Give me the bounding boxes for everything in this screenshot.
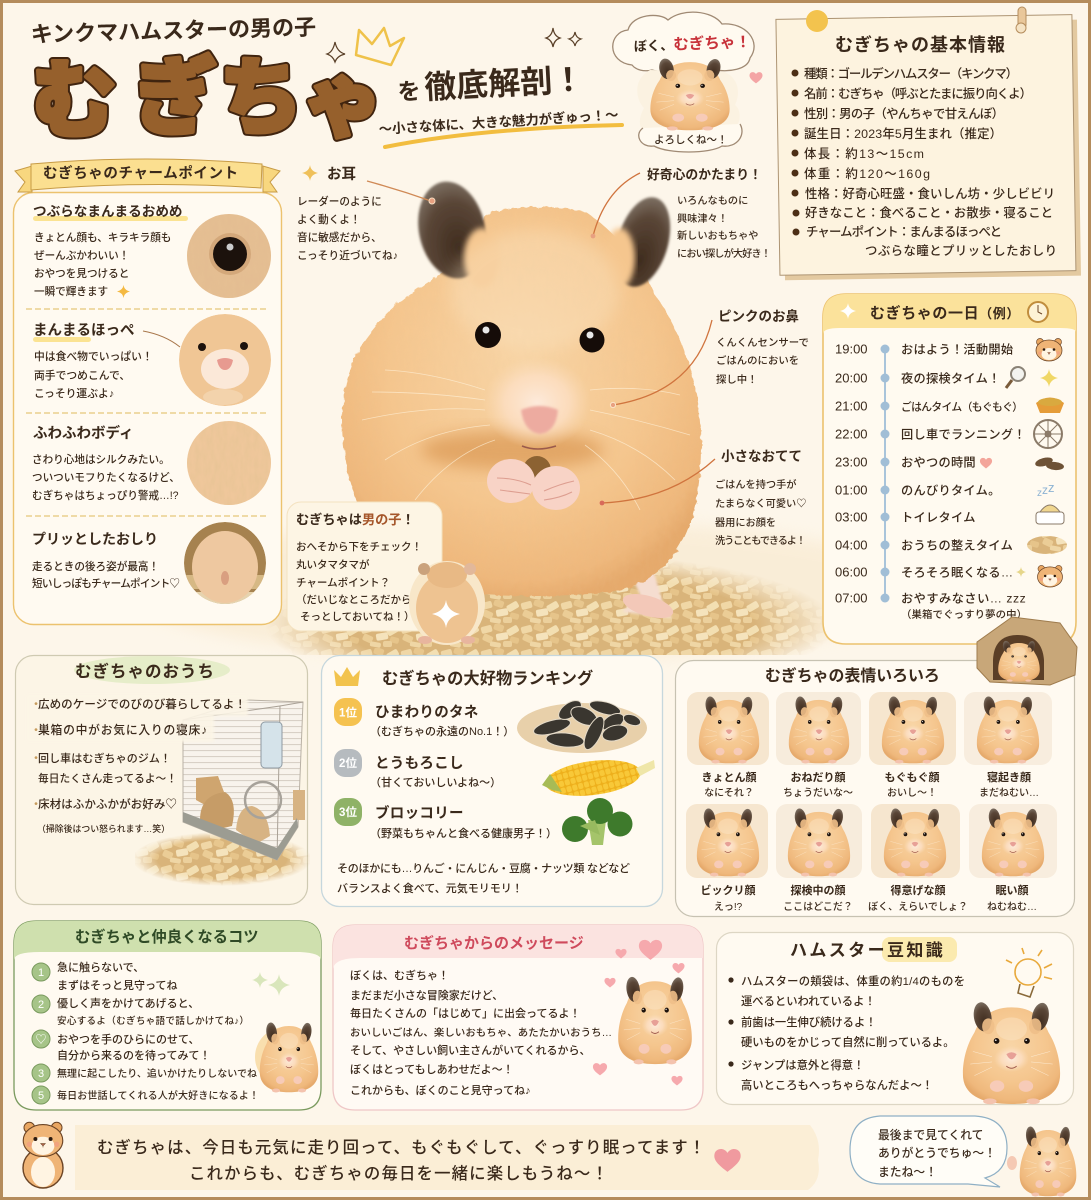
heading: むぎちゃのおうち xyxy=(75,661,215,681)
trivia list: 前歯は一生伸び続けるよ！ xyxy=(741,1015,877,1029)
cartoon hamster xyxy=(23,1122,63,1188)
trivia list: ジャンプは意外と得意！ xyxy=(741,1058,864,1072)
expression captions row 1: ちょうだいな〜 xyxy=(783,787,853,799)
tips numbers: 1 xyxy=(38,967,44,979)
label: curiosity: 新しいおもちゃや xyxy=(677,229,758,242)
main title: mugicha xyxy=(32,51,383,148)
home list: 巣箱の中がお気に入りの寝床♪ xyxy=(38,723,207,737)
heading: むぎちゃの大好物ランキング xyxy=(382,669,593,688)
label: ear: 音に敏感だから、 xyxy=(297,231,382,244)
timeline rows: 04:00 xyxy=(835,538,868,552)
timeline rows: 23:00 xyxy=(835,454,868,470)
tips text: 無理に起こしたり、追いかけたりしないでね xyxy=(57,1067,257,1080)
timeline rows: （巣箱でぐっすり夢の中） xyxy=(901,608,1027,621)
label: ear: レーダーのように xyxy=(297,195,382,208)
speech bubble: boku mugicha xyxy=(613,12,763,152)
item: cheeks: こっそり運ぶよ♪ xyxy=(34,387,114,400)
panel: charm points xyxy=(14,159,282,624)
home list xyxy=(30,697,246,834)
bubble text: ぼく、むぎちゃ！ xyxy=(633,32,751,55)
timeline rows: そろそろ眠くなる… xyxy=(901,566,1013,580)
tips text: 優しく声をかけてあげると、 xyxy=(57,996,199,1010)
timeline icons: z xyxy=(1037,488,1042,499)
expression captions row 1: きょとん顔 xyxy=(702,770,756,784)
icon: pin xyxy=(1016,7,1026,33)
hamster in cardboard house xyxy=(977,617,1077,685)
rank 3 xyxy=(334,798,632,845)
callout: boy: そっとしておいてね！） xyxy=(300,610,415,623)
label: curiosity: いろんなものに xyxy=(677,195,748,207)
photo: rear view xyxy=(184,522,266,606)
trivia list: 運べるといわれているよ！ xyxy=(741,995,876,1008)
icon: sparkles xyxy=(327,28,581,62)
timeline rows: 22:00 xyxy=(835,426,868,442)
fact list: 体重：約120〜160g xyxy=(804,166,930,181)
callout: boy: おへそから下をチェック！ xyxy=(296,541,422,553)
panel: mugicha's home xyxy=(16,656,310,904)
home list: 床材はふかふかがお好み♡ xyxy=(38,797,177,811)
photo: waving hamster xyxy=(1007,1126,1076,1196)
paws and food xyxy=(487,456,580,510)
rank 3: ブロッコリー xyxy=(375,804,464,822)
icon: broccoli xyxy=(562,798,632,845)
timeline rows xyxy=(835,342,1027,621)
timeline rows: 夜の探検タイム！ xyxy=(901,370,1001,386)
icon: crown xyxy=(356,28,404,65)
heading xyxy=(74,656,230,684)
heading: ハムスター豆知識 xyxy=(790,941,945,960)
trivia list xyxy=(728,974,965,1092)
timeline rows: トイレタイム xyxy=(901,510,976,524)
photo: small hamster xyxy=(650,58,730,130)
label: small paws: 小さなおてて xyxy=(721,449,802,464)
speech bubble: thanks: 最後まで見てくれて xyxy=(878,1128,983,1142)
other foods text: バランスよく食べて、元気モリモリ！ xyxy=(337,881,523,895)
footer message: むぎちゃは、今日も元気に走り回って、もぐもぐして、ぐっすり眠ってます！ xyxy=(97,1139,706,1157)
tips text: まずはそっと見守ってね xyxy=(57,979,177,992)
trivia list: ハムスターの頬袋は、体重の約1/4のものを xyxy=(741,974,965,988)
photo: hamster xyxy=(618,976,692,1064)
title block xyxy=(30,15,622,148)
item: fluffy body: さわり心地はシルクみたい。 xyxy=(32,453,170,466)
timeline rows: 01:00 xyxy=(835,482,868,498)
timeline rows: 19:00 xyxy=(835,342,868,356)
photo: hamster xyxy=(963,1001,1060,1104)
message text: おいしいごはん、楽しいおもちゃ、あたたかいおうち… xyxy=(350,1026,612,1039)
icon: hearts xyxy=(593,940,685,1086)
rank 1: （むぎちゃの永遠のNo.1！） xyxy=(370,724,514,738)
timeline rows: 07:00 xyxy=(835,590,868,606)
expression tiles row 2 xyxy=(686,804,1057,878)
timeline rows: 06:00 xyxy=(835,564,868,580)
expression tiles row 1 xyxy=(687,692,1052,765)
item: eyes: おやつを見つけると xyxy=(34,268,129,280)
expression captions row 1: なにそれ？ xyxy=(704,787,754,799)
item: eyes xyxy=(33,204,271,298)
item: cheeks: 中は食べ物でいっぱい！ xyxy=(34,349,153,363)
item: cheeks: 両手でつめこんで、 xyxy=(34,368,130,382)
fur texture xyxy=(342,205,702,600)
speech bubble: thanks xyxy=(850,1116,1007,1187)
subtitle: golden hamster boy: キンクマハムスターの男の子 xyxy=(30,15,316,47)
panel: message xyxy=(333,925,703,1110)
main title: mugicha: む xyxy=(32,54,116,148)
panel: basic info xyxy=(776,7,1081,280)
home list: ・ xyxy=(30,751,42,765)
item: eyes: つぶらなまんまるおめめ xyxy=(33,204,183,219)
label: pink nose: くんくんセンサーで xyxy=(716,337,809,349)
trivia list: 硬いものをかじって自然に削っているよ。 xyxy=(741,1035,955,1049)
heading xyxy=(840,302,1048,322)
main title: mugicha: む xyxy=(32,54,116,148)
item: fluffy body xyxy=(32,421,271,505)
label: ear: お耳 xyxy=(327,166,356,183)
photo: fur xyxy=(187,421,271,505)
fact list: 名前：むぎちゃ（呼ぶとたまに振り向くよ） xyxy=(804,86,1032,101)
expression captions row 2: 探検中の顔 xyxy=(790,883,846,897)
heading: むぎちゃの基本情報 xyxy=(835,34,1006,55)
label: curiosity: におい探しが大好き！ xyxy=(677,247,771,260)
main hamster photo xyxy=(342,175,702,623)
footer band xyxy=(75,1125,819,1190)
timeline rows: 回し車でランニング！ xyxy=(901,426,1026,442)
home list: （掃除後はつい怒られます…笑） xyxy=(37,823,170,834)
home list: 回し車はむぎちゃのジム！ xyxy=(38,751,171,765)
label: pink nose: ごはんのにおいを xyxy=(716,354,799,367)
label: pink nose xyxy=(610,308,809,408)
label: ear: こっそり近づいてね♪ xyxy=(297,249,398,262)
message text: これからも、ぼくのこと見守ってね♪ xyxy=(350,1084,531,1097)
expression captions row 2: 眠い顔 xyxy=(996,883,1028,897)
photo: cheeks xyxy=(179,314,272,406)
right ear xyxy=(605,191,680,293)
timeline icons xyxy=(980,338,1067,587)
eyes xyxy=(475,322,604,352)
timeline rows: おやすみなさい… zzz xyxy=(901,592,1026,606)
nose xyxy=(521,406,558,434)
icon: sparkles xyxy=(252,972,290,996)
label: pink nose: ピンクのお鼻 xyxy=(718,308,799,324)
timeline rows: おうちの整えタイム xyxy=(901,538,1013,552)
message text xyxy=(350,968,612,1097)
label: small paws xyxy=(600,449,806,547)
left ear xyxy=(410,175,500,288)
home list: ・ xyxy=(30,797,42,811)
expression captions row 2: ぼく、えらいでしょ？ xyxy=(868,901,968,913)
fact list: 性別：男の子（やんちゃで甘えんぼ） xyxy=(804,107,1004,121)
footer message xyxy=(97,1139,706,1183)
expression captions row 1 xyxy=(702,770,1039,799)
timeline axis xyxy=(880,344,890,602)
heading xyxy=(334,667,593,688)
timeline icons: z xyxy=(1042,483,1048,497)
muzzle xyxy=(483,357,591,449)
timeline rows: 03:00 xyxy=(835,510,868,524)
photo: hamster xyxy=(255,1022,318,1092)
main title: mugicha: ぎ xyxy=(133,51,217,145)
timeline rows: 21:00 xyxy=(835,398,868,414)
expression captions row 2: えっ!? xyxy=(714,901,743,913)
label: ear xyxy=(297,165,435,262)
tips text: 自分から来るのを待ってみて！ xyxy=(57,1048,210,1062)
item: eyes: きょとん顔も、キラキラ顔も xyxy=(34,231,171,244)
bubble caption: よろしくね〜！ xyxy=(654,134,728,146)
label: curiosity: 好奇心のかたまり！ xyxy=(647,167,762,182)
message text: ぼくはとってもしあわせだよ〜！ xyxy=(350,1063,514,1076)
fact list: 誕生日：2023年5月生まれ（推定） xyxy=(804,126,1002,141)
fact list: チャームポイント：まんまるほっぺと xyxy=(806,225,1002,239)
expression captions row 1: もぐもぐ顔 xyxy=(884,770,940,784)
rank 2: 2位 xyxy=(339,756,357,770)
item: eyes: ぜーんぶかわいい！ xyxy=(34,250,129,262)
foot xyxy=(620,560,676,623)
home list: ・ xyxy=(30,697,42,711)
callout: boy: チャームポイント？ xyxy=(296,577,390,589)
panel: tips xyxy=(14,921,321,1110)
callout: boy: （だいじなところだから xyxy=(296,593,412,606)
home list: 毎日たくさん走ってるよ〜！ xyxy=(38,772,177,785)
item: fluffy body: ついついモフりたくなるけど、 xyxy=(32,472,180,484)
whiskers xyxy=(362,370,690,510)
footer message: これからも、むぎちゃの毎日を一緒に楽しもうね〜！ xyxy=(189,1165,609,1183)
icon: heart xyxy=(714,1149,741,1172)
shadow below muzzle xyxy=(420,430,604,470)
expression captions row 1: 寝起き顔 xyxy=(987,770,1031,784)
other foods text xyxy=(337,861,630,895)
label: small paws: 器用にお顔を xyxy=(715,516,776,529)
item: cheeks: まんまるほっぺ xyxy=(33,322,134,339)
message text: 毎日たくさんの「はじめて」に出会ってるよ！ xyxy=(350,1006,580,1020)
tips numbers: 2 xyxy=(38,999,44,1011)
fact list: つぶらな瞳とプリッとしたおしり xyxy=(865,244,1057,258)
rank 2: （甘くておいしいよね〜） xyxy=(370,775,501,789)
item: rear: プリッとしたおしり xyxy=(32,531,158,547)
item: eyes: 一瞬で輝きます xyxy=(34,285,108,298)
rank 1: 1位 xyxy=(339,706,357,720)
message text: まだまだ小さな冒険家だけど、 xyxy=(350,988,503,1002)
text wash xyxy=(26,694,248,742)
home list: ・ xyxy=(30,723,42,737)
ribbon heading: むぎちゃのチャームポイント xyxy=(43,164,239,182)
rank 1: ひまわりのタネ xyxy=(375,704,479,721)
callout: boy: むぎちゃは男の子！ xyxy=(296,511,415,527)
expression captions row 2: ビックリ顔 xyxy=(700,883,756,897)
rank 2 xyxy=(334,749,655,801)
label: pink nose: 探し中！ xyxy=(716,373,758,386)
other foods text: そのほかにも…りんご・にんじん・豆腐・ナッツ類 などなど xyxy=(337,861,630,875)
tagline underline xyxy=(385,125,622,147)
item: rear: 走るときの後ろ姿が最高！ xyxy=(32,560,159,573)
tips text: おやつを手のひらにのせて、 xyxy=(57,1032,199,1046)
label: small paws: たまらなく可愛い♡ xyxy=(715,497,806,510)
panel: favorite food ranking xyxy=(322,656,662,906)
expression captions row 2: ねむねむ… xyxy=(987,901,1037,913)
label: small paws: 洗うこともできるよ！ xyxy=(715,534,806,547)
rank 3: （野菜もちゃんと食べる健康男子！） xyxy=(370,826,557,840)
label: small paws: ごはんを持つ手が xyxy=(715,478,796,491)
photo: eye closeup xyxy=(187,214,271,298)
main title: mugicha: ち xyxy=(219,51,303,145)
label: curiosity: 興味津々！ xyxy=(677,212,728,225)
expression captions row 1: おねだり顔 xyxy=(790,770,846,784)
rank 3: 3位 xyxy=(339,805,357,819)
fact list: 体長：約13〜15cm xyxy=(804,146,924,161)
main title: mugicha: ゃ xyxy=(303,58,383,147)
message text: ぼくは、むぎちゃ！ xyxy=(350,968,449,982)
hamster body xyxy=(342,207,701,596)
ribbon heading xyxy=(15,159,280,192)
panel: hamster trivia xyxy=(716,932,1074,1104)
bedding under hamster xyxy=(272,562,824,655)
expression captions row 2 xyxy=(700,883,1037,913)
heading: むぎちゃと仲良くなるコツ xyxy=(75,928,259,946)
fact list: 性格：好奇心旺盛・食いしん坊・少しビビリ xyxy=(805,186,1055,201)
speech bubble: thanks: またね〜！ xyxy=(878,1165,937,1179)
fact list: 種類：ゴールデンハムスター（キンクマ） xyxy=(804,66,1018,81)
tips text: 急に触らないで、 xyxy=(57,960,144,974)
icon: sunflower seeds xyxy=(517,697,647,753)
expression captions row 1: おいし〜！ xyxy=(887,787,937,799)
forehead highlight xyxy=(450,230,620,350)
panel: daily schedule xyxy=(823,294,1076,644)
rank 2: とうもろこし xyxy=(375,755,464,772)
main title: mugicha: ぎ xyxy=(133,51,217,145)
home list: 広めのケージでのびのび暮らしてるよ！ xyxy=(38,697,246,711)
timeline rows: おはよう！活動開始 xyxy=(901,342,1013,356)
speech bubble: thanks: ありがとうでちゅ〜！ xyxy=(878,1146,996,1160)
message text: そして、やさしい飼い主さんがいてくれるから、 xyxy=(350,1043,590,1057)
timeline rows: ごはんタイム（もぐもぐ） xyxy=(901,400,1023,414)
rank 1 xyxy=(334,697,647,753)
item: rear: 短いしっぽもチャームポイント♡ xyxy=(32,577,180,590)
title suffix: を徹底解剖！ xyxy=(396,61,585,107)
heading: むぎちゃからのメッセージ xyxy=(404,934,584,952)
item: rear xyxy=(32,522,266,606)
item: fluffy body: むぎちゃはちょっぴり警戒…!? xyxy=(32,489,179,502)
expression captions row 2: ここはどこだ？ xyxy=(783,901,853,913)
callout: boy xyxy=(287,502,485,645)
callout: boy: 丸いタマタマが xyxy=(296,558,370,571)
icon: corn xyxy=(542,755,655,801)
timeline rows: 20:00 xyxy=(835,370,868,386)
mouth xyxy=(522,446,556,449)
tips numbers: ♡ xyxy=(36,1033,46,1046)
tips numbers: 3 xyxy=(38,1068,44,1080)
icon: clip xyxy=(806,10,828,32)
fact list: 好きなこと：食べること・お散歩・寝ること xyxy=(805,205,1053,220)
heading: むぎちゃの一日（例） xyxy=(870,304,1020,322)
heading: むぎちゃの表情いろいろ xyxy=(765,666,940,685)
label: curiosity xyxy=(591,167,771,260)
fact list xyxy=(792,66,1057,258)
tips numbers xyxy=(32,963,50,1104)
icon: light bulb xyxy=(1006,948,1052,997)
item: cheeks xyxy=(33,314,272,406)
trivia list: 高いところもへっちゃらなんだよ〜！ xyxy=(741,1078,933,1092)
tips text: 毎日お世話してくれる人が大好きになるよ！ xyxy=(57,1089,259,1102)
photo: cage xyxy=(135,700,310,886)
tips text xyxy=(57,960,259,1102)
icon: heart xyxy=(749,72,763,83)
tips text: 安心するよ（むぎちゃ語で話しかけてね♪） xyxy=(57,1015,249,1027)
main title: mugicha: ち xyxy=(219,51,303,145)
label: ear: よく動くよ！ xyxy=(297,213,361,226)
main title: mugicha: ゃ xyxy=(303,58,383,147)
expression captions row 1: まだねむい… xyxy=(979,787,1039,799)
timeline rows: のんびりタイム。 xyxy=(901,484,1001,498)
panel: expressions xyxy=(676,660,1074,916)
tagline: 〜小さな体に、大きな魅力がぎゅっ！〜 xyxy=(378,106,619,137)
expression captions row 2: 得意げな顔 xyxy=(890,883,946,897)
item: fluffy body: ふわふわボディ xyxy=(33,424,133,442)
tips numbers: 5 xyxy=(38,1090,44,1102)
timeline icons: z xyxy=(1048,480,1054,495)
photo: belly up hamster xyxy=(409,561,485,645)
timeline rows: おやつの時間 xyxy=(901,454,976,470)
